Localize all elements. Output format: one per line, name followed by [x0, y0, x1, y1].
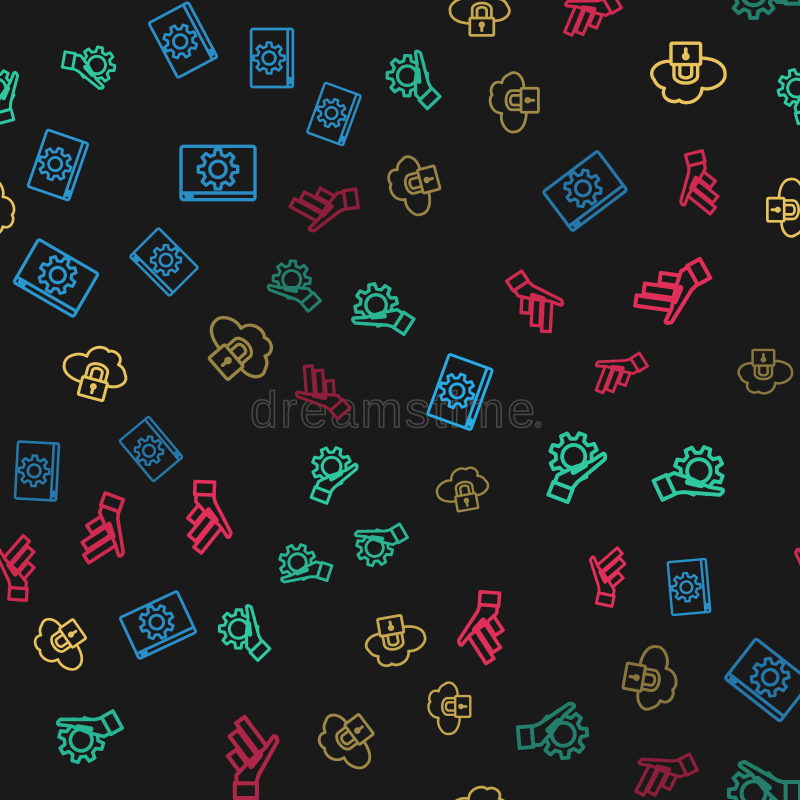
icon: hand chart: [793, 534, 800, 601]
icon: tablet: [119, 416, 183, 482]
icon: hand gear: [274, 540, 335, 594]
icon: cloud lock: [767, 179, 800, 236]
icon: cloud lock: [0, 179, 14, 236]
icon: cloud lock: [450, 787, 509, 800]
icon: hand gear: [729, 762, 800, 800]
icon: hand gear: [48, 695, 129, 770]
icon: hand chart: [625, 740, 704, 800]
icon: cloud lock: [193, 302, 284, 394]
icon: hand gear: [301, 442, 361, 509]
icon: hand chart: [621, 242, 720, 334]
icon: tablet: [668, 559, 710, 615]
icon: hand chart: [0, 534, 46, 601]
icon: tablet: [15, 441, 59, 501]
icon: tablet: [427, 354, 493, 430]
icon: cloud lock: [428, 682, 470, 734]
icon: hand chart: [457, 591, 517, 665]
icon: hand chart: [175, 481, 233, 554]
icon: hand gear: [344, 276, 421, 349]
icon: hand gear: [535, 426, 610, 509]
icon: tablet: [14, 239, 98, 317]
icon: cloud lock: [739, 350, 792, 393]
watermark: dreamstime: [250, 382, 535, 438]
icon: hand gear: [0, 64, 28, 126]
icon: hand gear: [729, 0, 800, 18]
icon: hand gear: [60, 42, 118, 90]
icon: cloud lock: [309, 701, 386, 780]
icon: cloud lock: [362, 612, 429, 670]
icon: cloud lock: [620, 642, 682, 714]
icon: tablet: [130, 228, 198, 296]
icon: hand chart: [493, 262, 573, 345]
icon: hand chart: [287, 173, 361, 234]
icon: hand gear: [262, 253, 329, 321]
icon: hand gear: [516, 702, 589, 762]
icon: cloud lock: [490, 73, 538, 132]
icon: hand chart: [670, 147, 733, 220]
watermark: ®: [535, 420, 542, 430]
icon: tablet: [725, 639, 800, 721]
icon: cloud lock: [58, 339, 132, 405]
icon: tablet: [181, 146, 255, 200]
icon: hand gear: [348, 511, 413, 572]
icon: cloud lock: [26, 607, 97, 681]
icon: tablet: [120, 591, 196, 659]
icon: hand chart: [64, 487, 140, 573]
icon: hand gear: [379, 44, 452, 117]
icon: cloud lock: [450, 0, 509, 35]
icon: hand gear: [648, 439, 734, 518]
icon: hand chart: [582, 543, 638, 609]
icon: hand chart: [552, 0, 629, 51]
icon: cloud lock: [652, 43, 725, 103]
icon: tablet: [149, 2, 217, 78]
icon: tablet: [28, 130, 88, 200]
icon: hand chart: [286, 352, 361, 429]
icon: hand gear: [774, 64, 800, 126]
icon: hand chart: [215, 717, 277, 798]
icon: tablet: [251, 29, 293, 87]
icon: cloud lock: [383, 151, 445, 221]
icon: tablet: [307, 83, 361, 145]
icon: cloud lock: [434, 464, 492, 515]
icon: hand chart: [584, 341, 655, 408]
icon: hand gear: [212, 598, 281, 668]
icon: tablet: [543, 151, 627, 231]
